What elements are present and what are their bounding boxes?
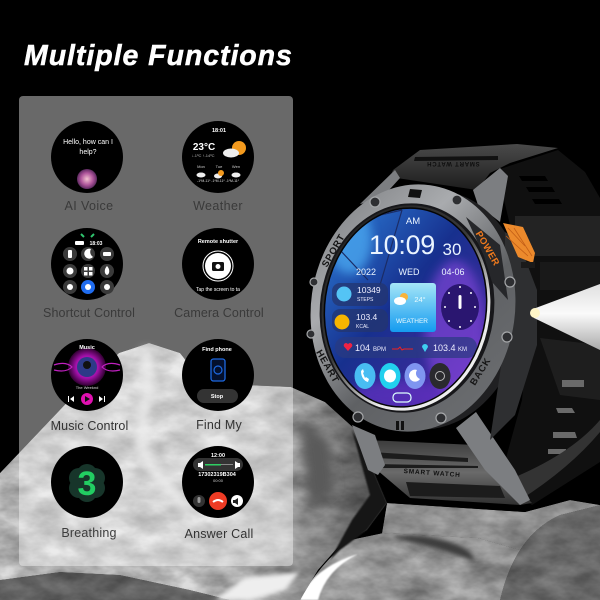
- time and date: [356, 216, 465, 277]
- feature: Answer Call: [182, 446, 254, 541]
- feature: Answer Call: 12:00: [211, 453, 225, 459]
- health row: 104: [355, 343, 370, 353]
- feature: AI Voice: AI Voice: [64, 199, 114, 213]
- feature: Find My: Find phone: [202, 347, 232, 353]
- feature: Camera Control: Remote shutter: [198, 239, 239, 245]
- kcal tile: 103.4: [356, 312, 378, 322]
- health row: KM: [458, 347, 467, 353]
- weather tile: [390, 283, 436, 332]
- feature: Weather: Weather: [193, 199, 243, 213]
- feature: Camera Control: Camera Control: [174, 306, 264, 320]
- health row: [335, 337, 477, 358]
- weather tile: WEATHER: [396, 318, 428, 325]
- time and date: 04-06: [441, 267, 465, 277]
- feature: Weather: [182, 121, 254, 213]
- feature: Camera Control: [174, 228, 264, 320]
- time and date: 2022: [356, 267, 376, 277]
- bezel labels: [313, 229, 502, 388]
- smartwatch: [295, 144, 600, 505]
- feature: Breathing: 3: [78, 465, 96, 503]
- feature: Weather: Wen: [232, 164, 240, 169]
- feature: Find My: Stop: [211, 394, 224, 400]
- time and date: WED: [398, 267, 420, 277]
- feature: AI Voice: [51, 121, 123, 213]
- bezel marks: [396, 189, 422, 430]
- feature: Weather: 23°C: [193, 142, 215, 153]
- health row: BPM: [373, 347, 386, 353]
- feature: Music Control: Music: [79, 345, 95, 351]
- screws: [307, 195, 515, 423]
- feature: AI Voice: help?: [79, 149, 97, 156]
- lugs: [352, 168, 530, 505]
- label: heart: HEART: [313, 348, 341, 385]
- weather tile: 24°: [414, 295, 426, 304]
- feature: Weather: Mon: [197, 164, 205, 169]
- top strap: [390, 144, 558, 190]
- rocks: [0, 343, 600, 600]
- feature: Weather: 18:01: [212, 128, 226, 134]
- title: Multiple Functions: [24, 40, 293, 72]
- label: back: BACK: [468, 356, 494, 388]
- watch face: [325, 208, 486, 406]
- feature: Shortcut Control: [43, 228, 135, 320]
- feature: Music Control: Music Control: [51, 419, 128, 433]
- feature: Music Control: The Weeknd: [76, 385, 98, 390]
- feature: Find My: Find My: [196, 418, 242, 432]
- feature: Answer Call: 17302319B304: [198, 472, 237, 478]
- feature: Music Control: [51, 339, 128, 433]
- feature: Breathing: [51, 446, 123, 540]
- silver rim: [308, 194, 504, 422]
- text: strap bottom: SMART WATCH: [403, 468, 461, 479]
- feature: Camera Control: Tap the screen to ta: [196, 287, 240, 293]
- feature: Answer Call: Answer Call: [185, 527, 253, 541]
- feature: Weather: ↓-1ºC ↑-14ºC: [191, 153, 215, 158]
- feature: AI Voice: Hello, how can I: [63, 139, 113, 146]
- health row: 103.4: [433, 343, 456, 353]
- watch case side: [316, 178, 540, 442]
- steps tile: [332, 283, 388, 306]
- label: sport: SPORT: [320, 232, 348, 269]
- feature: Weather: -1ºM-11º -1ºM-11º -1ºM-11º: [197, 179, 240, 183]
- feature: Shortcut Control: 18:03: [90, 241, 103, 247]
- feature: Weather: Tue: [216, 164, 223, 169]
- time and date: 10:09: [369, 230, 435, 260]
- inner ring: [306, 192, 508, 424]
- flashlight beam: [530, 284, 600, 350]
- feature: Shortcut Control: Shortcut Control: [43, 306, 135, 320]
- kcal tile: KCAL: [356, 324, 369, 330]
- steps tile: 10349: [357, 285, 381, 295]
- feature: Breathing: Breathing: [61, 526, 117, 540]
- text: strap top: SMART WATCH: [426, 160, 480, 166]
- app icons: [354, 363, 450, 402]
- panel: functions: [19, 96, 293, 566]
- bottom strap: [367, 440, 532, 505]
- orange button: [503, 223, 535, 268]
- steps tile: STEPS: [357, 297, 374, 303]
- dial: [441, 284, 479, 330]
- right band: [497, 150, 600, 505]
- bezel dark power segment: [466, 217, 508, 300]
- bezel: [295, 171, 531, 445]
- feature: Answer Call: 00:00: [213, 478, 224, 483]
- right side frame: [490, 232, 537, 440]
- band highlights: [508, 176, 600, 500]
- time and date: AM: [406, 216, 420, 227]
- feature: Find My: [182, 339, 254, 432]
- label: power: POWER: [473, 229, 502, 268]
- black ring: [311, 197, 500, 418]
- kcal tile: [332, 309, 388, 332]
- time and date: 30: [443, 240, 461, 259]
